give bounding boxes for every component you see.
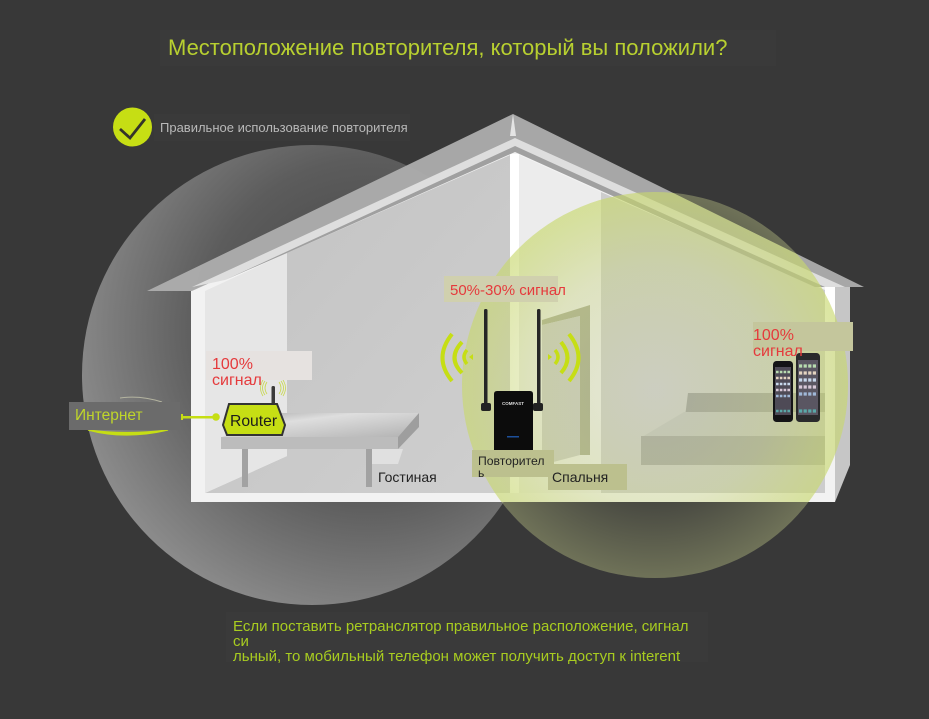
wifi waves: repeater left <box>442 334 473 381</box>
connector arrow <box>181 413 220 421</box>
bottom caption: си <box>233 633 249 650</box>
internet swoosh <box>88 397 168 435</box>
label: 100% signal left <box>206 351 312 389</box>
phones <box>773 353 820 422</box>
router: Router <box>230 413 277 430</box>
label: 100% signal left: 100% <box>212 356 253 373</box>
house: door <box>542 305 590 465</box>
house: left room side wall <box>205 253 287 493</box>
title: Местоположение повторителя, который вы положили? <box>168 35 727 60</box>
label: repeater signal: 50%-30% сигнал <box>450 282 566 299</box>
internet label <box>69 402 180 430</box>
bed <box>641 393 825 465</box>
label: repeater: Повторител <box>478 454 544 468</box>
right signal circle <box>462 192 848 578</box>
label: living room: Гостиная <box>378 469 437 485</box>
wifi waves: repeater right <box>548 334 578 381</box>
label: repeater: ь <box>478 466 484 480</box>
label: 100% signal right: 100% <box>753 327 794 344</box>
house: left room back wall <box>205 155 510 493</box>
house: divider wall <box>510 154 519 493</box>
title <box>160 30 776 66</box>
label: bedroom: Спальня <box>552 469 608 485</box>
router wifi waves <box>260 380 286 396</box>
left signal circle <box>82 145 542 605</box>
router <box>223 386 285 435</box>
table <box>221 413 419 487</box>
house: side wall outer right <box>835 287 850 502</box>
label: 100% signal right: сигнал <box>753 343 803 360</box>
house: white strip right <box>825 287 835 327</box>
house: right room side wall <box>519 155 601 493</box>
label: repeater <box>472 450 554 480</box>
label: bedroom <box>548 464 627 490</box>
house: outer white wall <box>191 145 835 502</box>
label: 100% signal right <box>753 322 853 360</box>
repeater device <box>481 309 543 452</box>
legend: correct use: Правильное использование повторителя <box>160 120 408 135</box>
label: repeater signal <box>444 276 566 302</box>
legend: correct use <box>113 108 410 146</box>
house: roof <box>147 114 864 291</box>
repeater device: COMFAST <box>502 401 524 406</box>
house: right room back wall <box>601 192 825 493</box>
bottom caption <box>226 612 708 665</box>
bottom caption: льный, то мобильный телефон может получить доступ к interent <box>233 648 681 665</box>
bottom caption: Если поставить ретранслятор правильное расположение, сигнал <box>233 618 689 635</box>
label: 100% signal left: сигнал <box>212 372 262 389</box>
house <box>147 114 864 502</box>
internet label: Интернет <box>75 407 143 424</box>
